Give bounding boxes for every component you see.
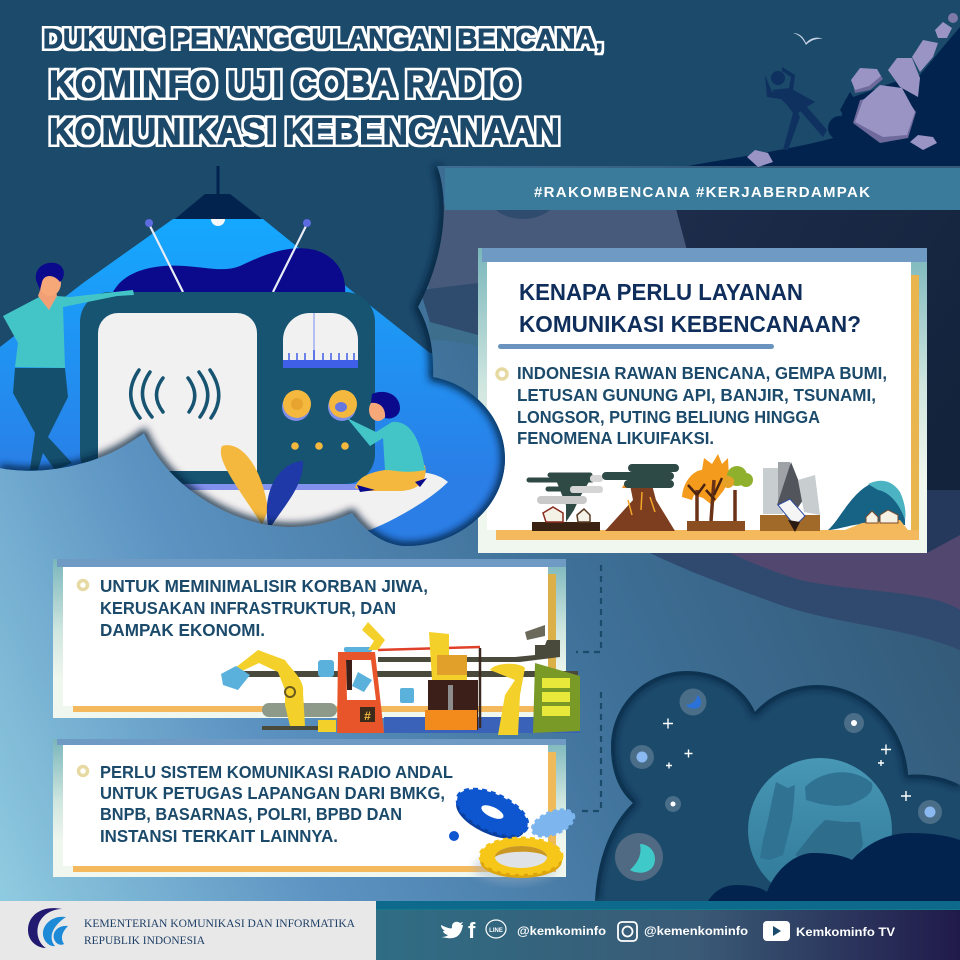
heading: KENAPA PERLU LAYANAN xyxy=(519,279,803,305)
text xyxy=(100,576,428,640)
antenna xyxy=(149,224,307,292)
light gear xyxy=(528,805,578,841)
heading xyxy=(519,279,861,337)
icon: tsunami xyxy=(828,481,908,530)
right arm xyxy=(490,664,525,735)
tuning dial xyxy=(283,313,358,368)
body text: LONGSOR, PUTING BELIUNG HINGGA xyxy=(517,407,820,427)
title: KOMINFO UJI COBA RADIO xyxy=(49,64,520,106)
body text xyxy=(517,363,887,448)
footer xyxy=(0,901,960,960)
ministry name: REPUBLIK INDONESIA xyxy=(84,933,205,947)
handle: @kemenkominfo xyxy=(644,924,748,938)
heading: KOMUNIKASI KEBENCANAAN? xyxy=(519,311,861,337)
gears illustration xyxy=(449,780,578,884)
yellow gear xyxy=(480,844,562,878)
stars xyxy=(663,718,911,801)
ministry name xyxy=(84,916,355,947)
text: INSTANSI TERKAIT LAINNYA. xyxy=(100,826,338,846)
icon: collapsed buildings xyxy=(760,462,820,532)
dark blob xyxy=(113,248,345,295)
moons and dots xyxy=(615,688,942,881)
man figure xyxy=(3,263,134,470)
handle: @kemkominfo xyxy=(517,924,606,938)
icon: line: LINE xyxy=(489,928,503,934)
text: DAMPAK EKONOMI. xyxy=(100,620,265,640)
hashtag band: #RAKOMBENCANA #KERJABERDAMPAK xyxy=(534,184,870,201)
panel: minimise victims xyxy=(53,559,566,718)
body text: LETUSAN GUNUNG API, BANJIR, TSUNAMI, xyxy=(517,385,876,405)
bird xyxy=(793,33,823,45)
dashed connectors xyxy=(576,565,601,811)
icon: volcano xyxy=(605,468,675,531)
lamp xyxy=(175,166,262,226)
boxes xyxy=(318,660,334,677)
icon: tornado xyxy=(529,475,603,531)
icon: youtube xyxy=(763,921,790,941)
knobs xyxy=(282,390,357,421)
text: BNPB, BASARNAS, POLRI, BPBD DAN xyxy=(100,804,402,824)
title xyxy=(43,23,603,152)
text: PERLU SISTEM KOMUNIKASI RADIO ANDAL xyxy=(100,762,453,782)
foreground hills xyxy=(708,833,960,901)
child figure xyxy=(335,392,427,492)
floor xyxy=(190,472,448,530)
title: DUKUNG PENANGGULANGAN BENCANA, xyxy=(43,23,603,54)
text: UNTUK PETUGAS LAPANGAN DARI BMKG, xyxy=(100,783,445,803)
silhouette figure xyxy=(765,67,827,150)
top right landslide illustration xyxy=(688,13,960,167)
text xyxy=(100,762,453,846)
body text: INDONESIA RAWAN BENCANA, GEMPA BUMI, xyxy=(517,363,887,383)
robot arm xyxy=(235,650,305,726)
factory illustration: # xyxy=(364,709,371,723)
hashtag band xyxy=(445,168,960,210)
earth xyxy=(748,758,892,902)
space cloud xyxy=(590,665,960,905)
ministry name: KEMENTERIAN KOMUNIKASI DAN INFORMATIKA xyxy=(84,916,355,930)
text: KERUSAKAN INFRASTRUKTUR, DAN xyxy=(100,598,396,618)
leaves xyxy=(221,445,303,525)
top arm xyxy=(362,622,385,650)
sound waves xyxy=(131,370,219,418)
icon: line xyxy=(486,920,506,938)
panel: radio system xyxy=(53,739,566,877)
icon: facebook: f xyxy=(468,918,476,943)
top cloud scene xyxy=(0,0,960,560)
blue gear xyxy=(449,780,534,848)
icon: twitter xyxy=(441,922,463,938)
panel: why xyxy=(478,248,927,553)
light cone xyxy=(0,219,520,560)
factory illustration xyxy=(221,622,580,735)
boulders xyxy=(747,13,958,167)
radio xyxy=(80,292,375,490)
body text: FENOMENA LIKUIFAKSI. xyxy=(517,428,714,448)
icon: forest fire xyxy=(682,454,753,531)
logo xyxy=(28,908,68,948)
channel: Kemkominfo TV xyxy=(796,925,895,939)
icon: instagram xyxy=(618,922,637,941)
press machine xyxy=(429,632,467,680)
title: KOMUNIKASI KEBENCANAAN xyxy=(49,111,560,152)
text: UNTUK MEMINIMALISIR KORBAN JIWA, xyxy=(100,576,428,596)
red machine xyxy=(337,652,384,733)
